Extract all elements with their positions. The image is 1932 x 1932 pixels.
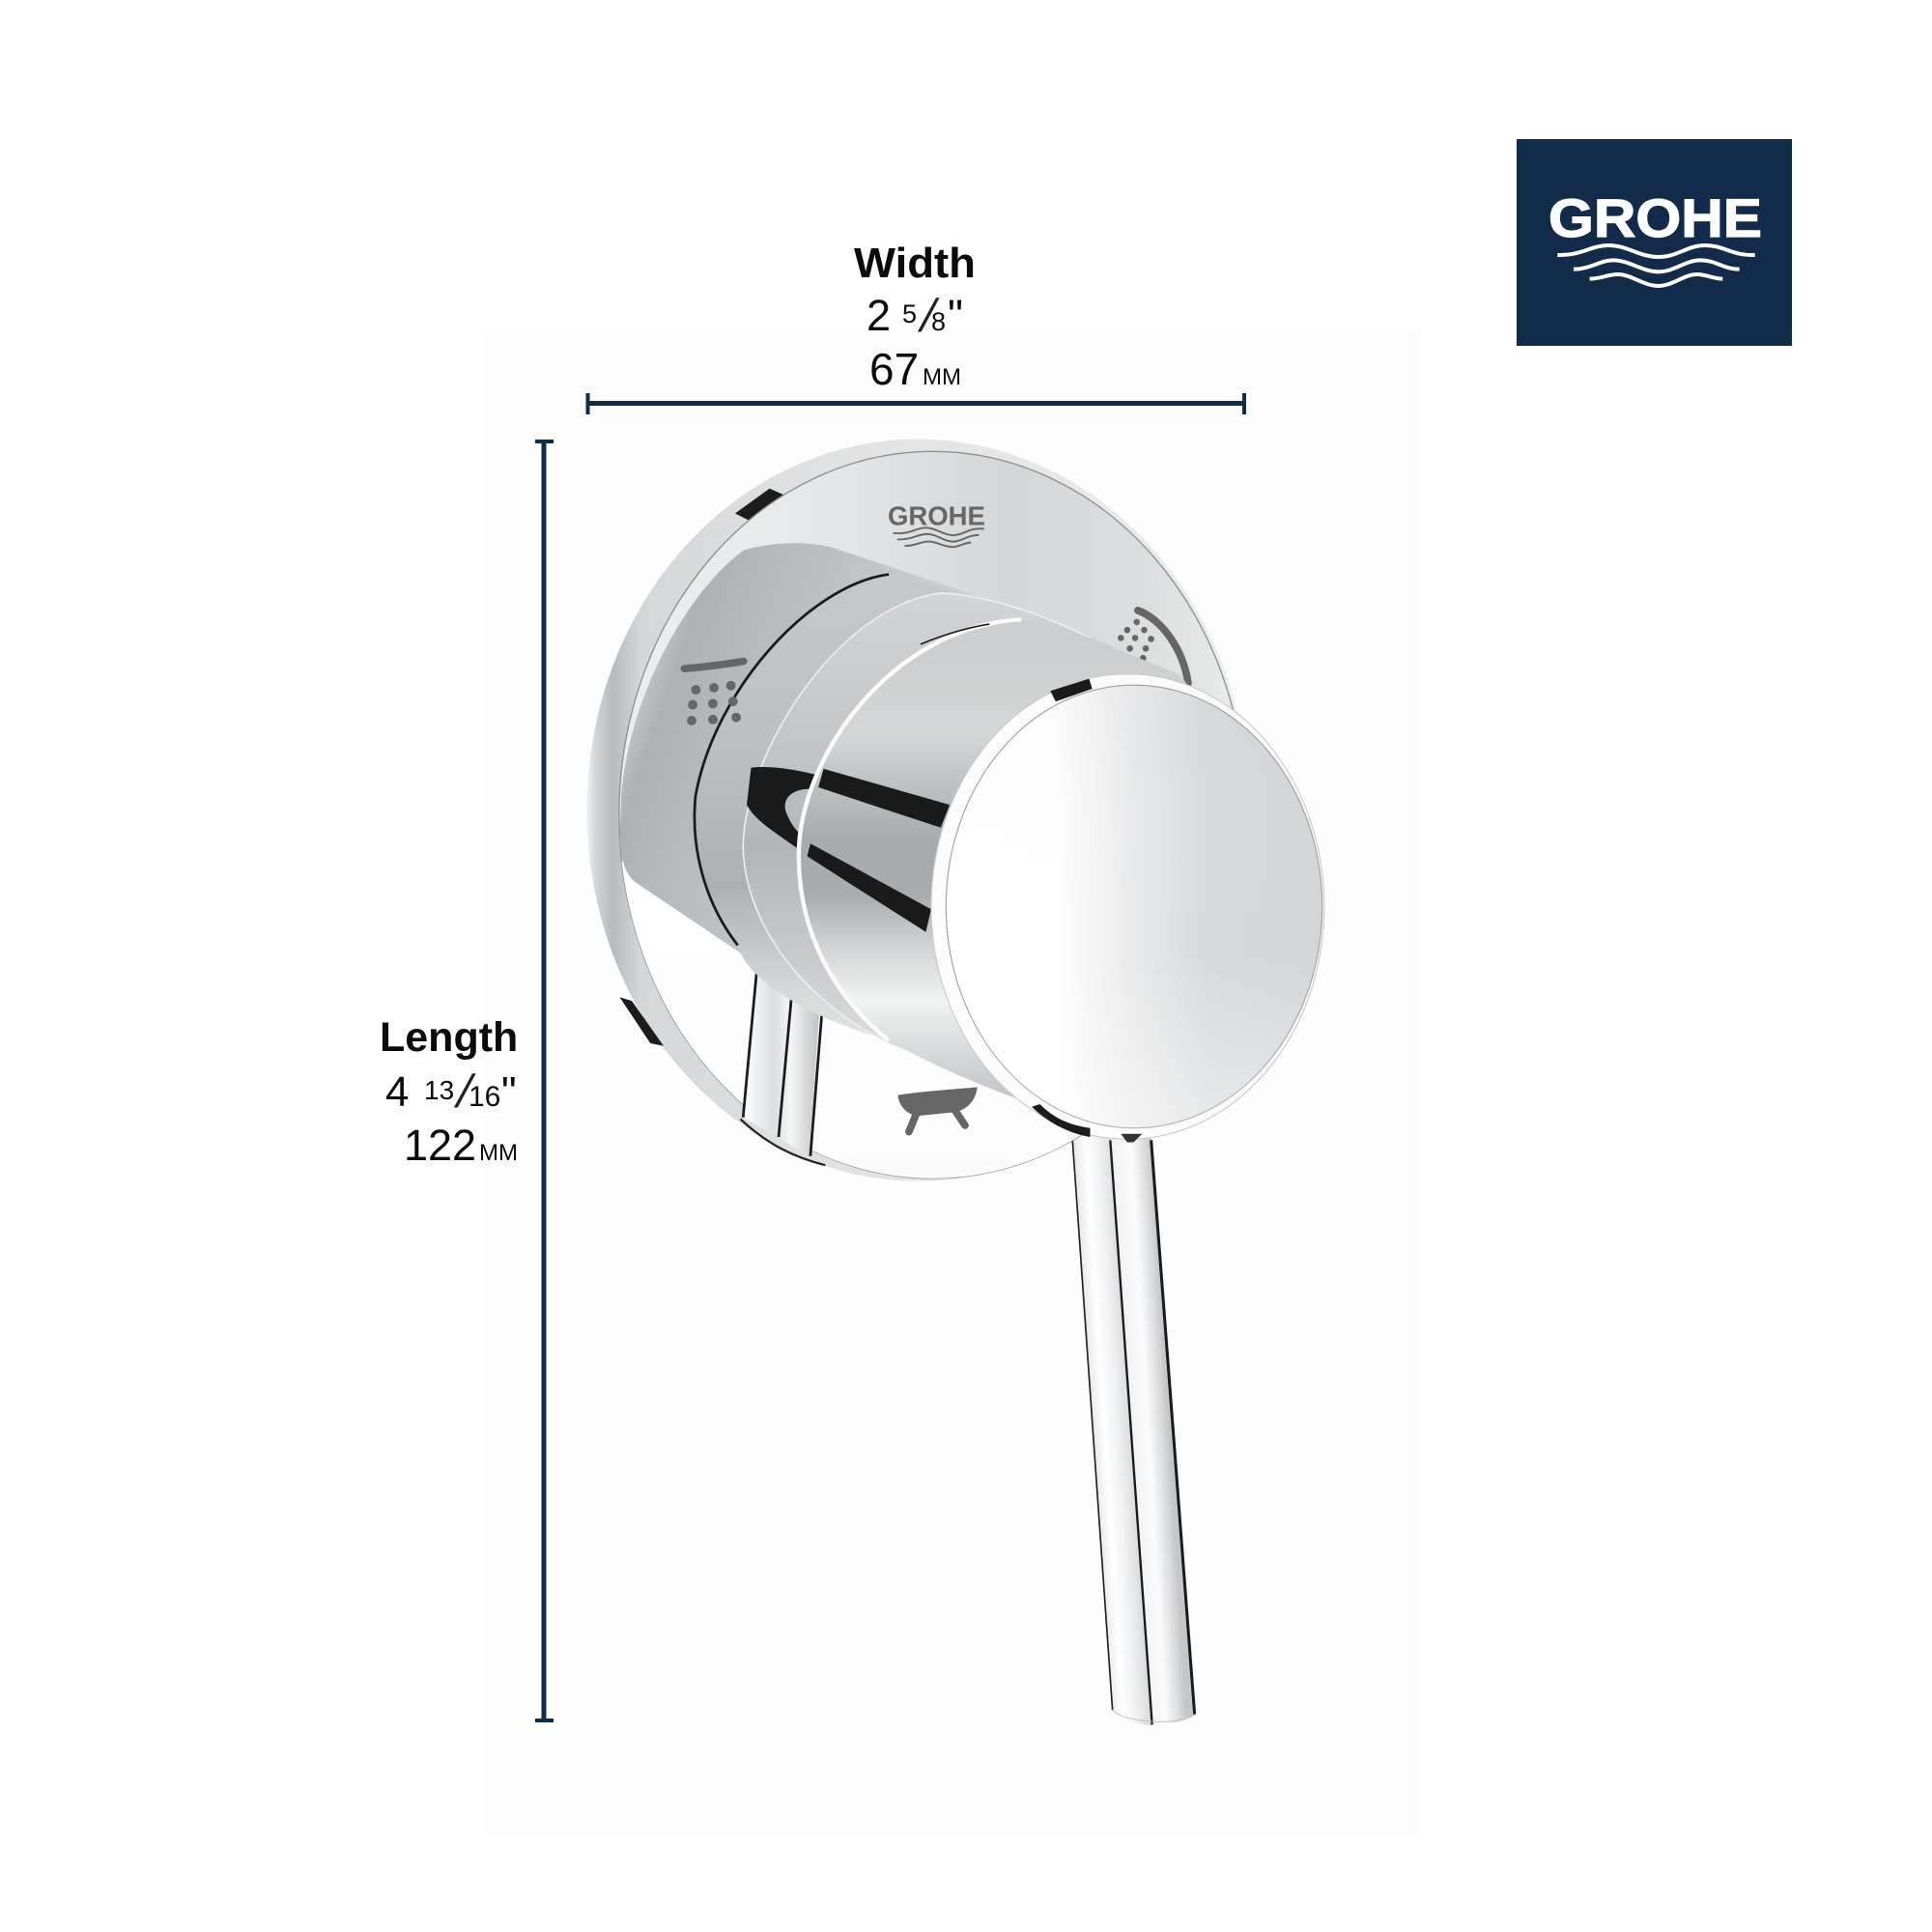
knob dark reflection bands [808, 769, 950, 932]
width in inches: 8 [931, 307, 946, 336]
plate edge dark reflections [619, 489, 793, 1046]
knob face [946, 685, 1322, 1128]
base ring [695, 573, 1069, 1094]
back plate edge [586, 440, 1249, 1181]
length in millimetres: 122 [404, 1121, 476, 1170]
lever handle [1072, 1136, 1196, 1725]
width in inches: " [948, 291, 963, 340]
length dimension line [535, 440, 554, 1722]
length in inches [385, 1066, 517, 1118]
middle ring [743, 593, 1090, 1099]
width heading: Width [854, 240, 976, 287]
logo wordmark: GROHE [1548, 187, 1762, 248]
knob rim [931, 674, 1324, 1139]
stem reflection [740, 964, 825, 1165]
length in millimetres: MM [479, 1140, 518, 1166]
length in inches: 4 [385, 1068, 409, 1116]
icon: hand shower [1118, 611, 1188, 683]
width in millimetres [869, 344, 961, 394]
plate lower highlight [622, 862, 1081, 1179]
length in inches: 13 [424, 1075, 454, 1105]
logo: GROHE badge [1517, 139, 1792, 346]
plate logo: GROHE [888, 501, 985, 531]
length in inches: " [501, 1068, 517, 1116]
width in millimetres: MM [923, 364, 961, 390]
width in inches: 2 [867, 291, 891, 340]
length in millimetres [404, 1121, 518, 1170]
width dimension label [854, 240, 976, 394]
logo waves [1557, 245, 1755, 286]
icon: overhead shower [684, 662, 744, 725]
plate logo [888, 501, 985, 547]
length heading: Length [380, 1014, 518, 1061]
width in inches: / [915, 291, 942, 342]
width in inches: 5 [902, 299, 917, 328]
escutcheon body [619, 543, 1175, 1104]
icon: bathtub [897, 1087, 978, 1132]
middle ring dark reflection [747, 767, 820, 855]
rim dark details [1032, 679, 1142, 1143]
width in millimetres: 67 [869, 344, 919, 394]
front plate [619, 451, 1246, 1179]
knob body [799, 619, 1260, 1121]
width in inches [867, 291, 963, 342]
product: diverter valve trim [586, 440, 1324, 1210]
length in inches: / [451, 1066, 478, 1118]
length in inches: 16 [469, 1081, 500, 1113]
length dimension label [380, 1014, 518, 1170]
width dimension line [585, 393, 1246, 414]
